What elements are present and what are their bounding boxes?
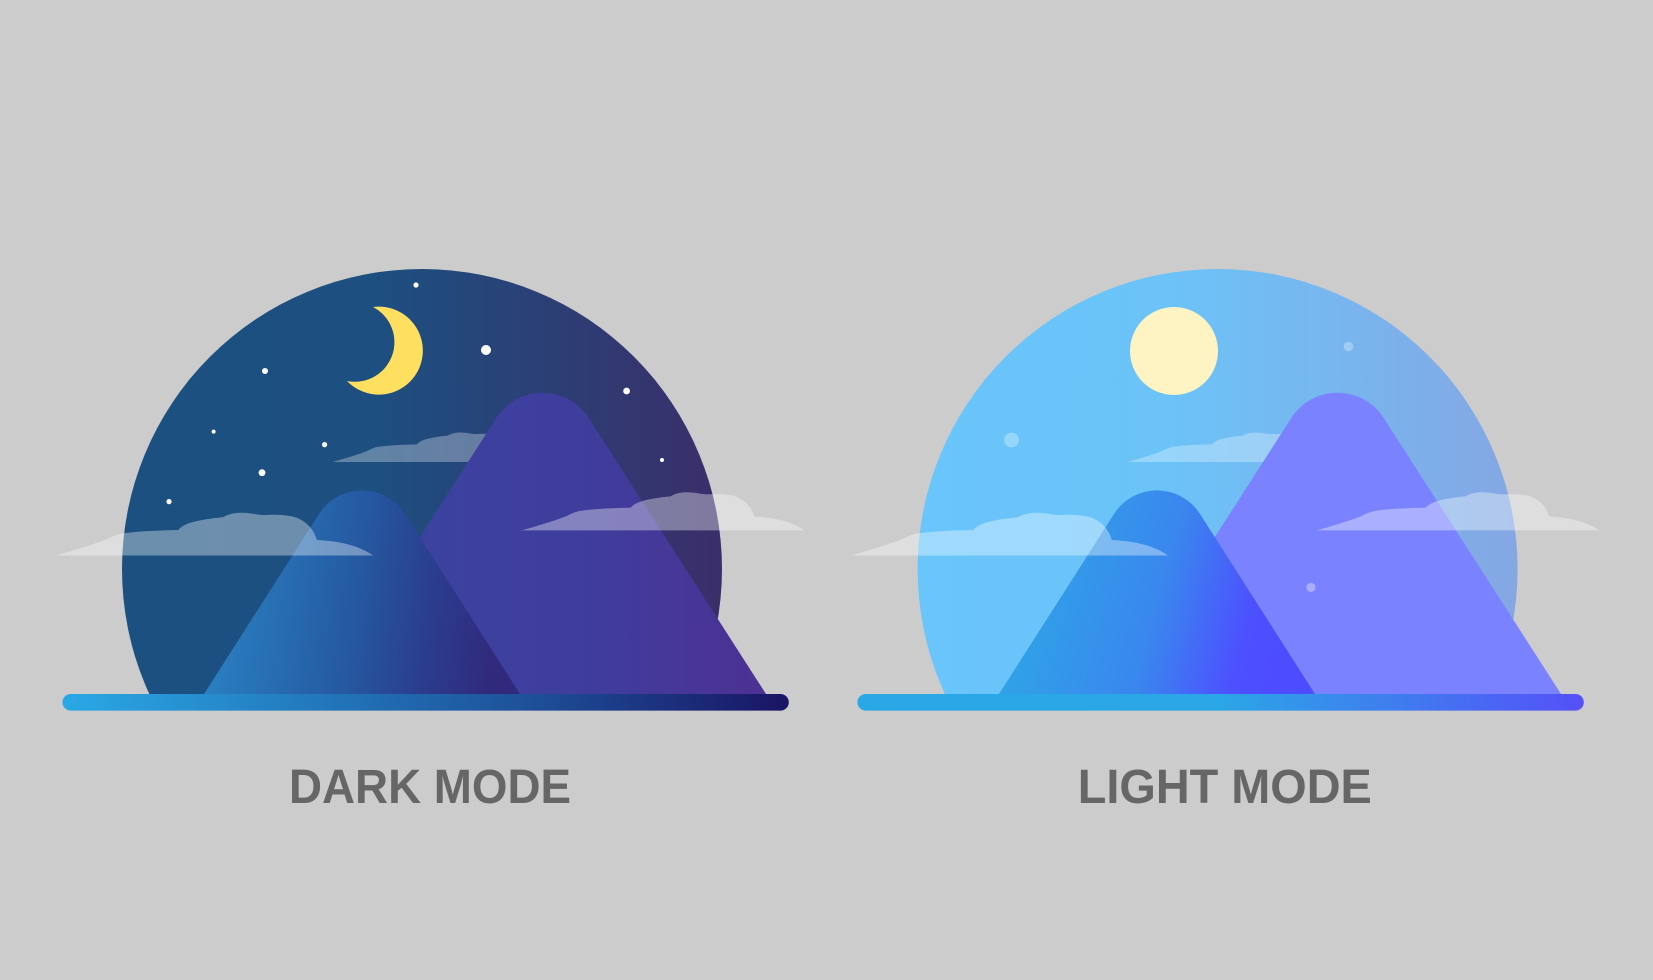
small mountain bbox=[999, 490, 1315, 694]
cloud behind big mountain bbox=[332, 432, 551, 462]
stars bbox=[166, 282, 664, 504]
night sky disc bbox=[122, 269, 722, 694]
infographic canvas bbox=[57, 269, 1599, 804]
big mountain bbox=[319, 393, 766, 694]
small mountain bbox=[204, 490, 520, 694]
label: light mode: LIGHT MODE bbox=[1078, 761, 1372, 814]
label: dark mode: DARK MODE bbox=[289, 761, 571, 814]
pale dot on mountain bbox=[1306, 583, 1316, 592]
day sky disc bbox=[918, 269, 1518, 694]
cloud behind big mountain bbox=[1128, 432, 1346, 462]
sun bbox=[1130, 307, 1218, 395]
right cloud bbox=[522, 492, 804, 530]
ground bar bbox=[62, 694, 789, 711]
big mountain bbox=[1114, 393, 1561, 694]
right cloud bbox=[1317, 492, 1599, 530]
left cloud bbox=[851, 513, 1168, 556]
pale dots bbox=[1004, 342, 1353, 447]
crescent moon bbox=[347, 307, 423, 395]
panel: light mode bbox=[852, 269, 1599, 804]
left cloud bbox=[56, 513, 373, 556]
ground bar bbox=[857, 694, 1584, 711]
panel: dark mode bbox=[57, 269, 804, 804]
